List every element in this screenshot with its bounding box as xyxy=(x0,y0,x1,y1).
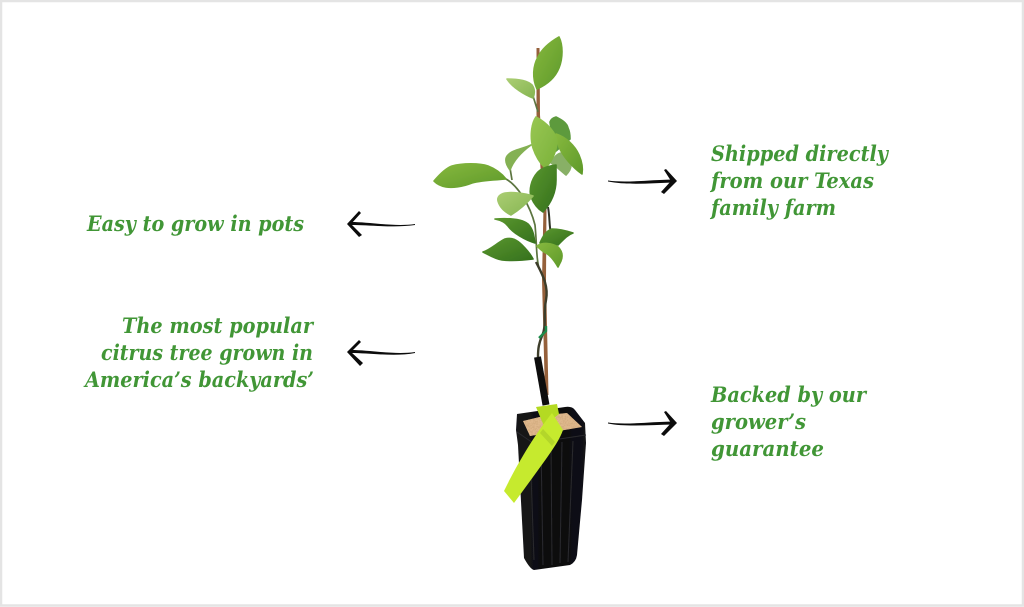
plant photo xyxy=(434,37,586,570)
leaf: long right xyxy=(556,134,582,174)
text: shipped directly: Shipped directly xyxy=(711,141,890,166)
text: backed by: grower’s xyxy=(711,409,806,434)
bamboo stake xyxy=(536,48,548,395)
arrow: top right xyxy=(608,169,677,194)
text: most popular: The most popular xyxy=(122,313,315,338)
leaf: mid xyxy=(498,193,533,215)
black tube xyxy=(538,357,546,405)
leaf: large centre xyxy=(531,117,557,168)
green tie xyxy=(539,326,546,338)
arrow: lower left xyxy=(347,340,415,366)
soil xyxy=(523,413,582,436)
arrow: top left xyxy=(347,211,415,237)
leaf: top xyxy=(534,37,562,89)
tag fold xyxy=(540,429,555,446)
text: shipped directly: family farm xyxy=(709,195,836,220)
tag band xyxy=(504,413,563,503)
pot xyxy=(516,407,586,570)
text: most popular: America’s backyards’ xyxy=(83,367,314,392)
text: backed by: Backed by our xyxy=(710,382,868,407)
leaves xyxy=(434,37,582,267)
arrow: lower right xyxy=(608,411,677,436)
leaf: lower left xyxy=(483,238,533,260)
leaf: small mid left xyxy=(506,145,531,170)
leaf: big left xyxy=(434,164,506,187)
leaf: dark centre xyxy=(530,165,556,212)
pot ribs xyxy=(517,432,586,565)
leaf: back upper xyxy=(550,117,570,151)
tag loop xyxy=(536,404,559,426)
text: shipped directly: from our Texas xyxy=(709,168,874,193)
text: easy to grow: Easy to grow in pots xyxy=(86,211,304,236)
text: most popular: citrus tree grown in xyxy=(101,340,313,365)
leaf: small upper xyxy=(507,79,534,98)
stems xyxy=(506,96,551,357)
text: backed by: guarantee xyxy=(711,436,824,461)
leaf: lower right xyxy=(540,229,573,245)
leaf: back lower xyxy=(551,153,571,175)
leaf: lower dark xyxy=(495,219,535,243)
leaf: lower front xyxy=(537,243,562,267)
